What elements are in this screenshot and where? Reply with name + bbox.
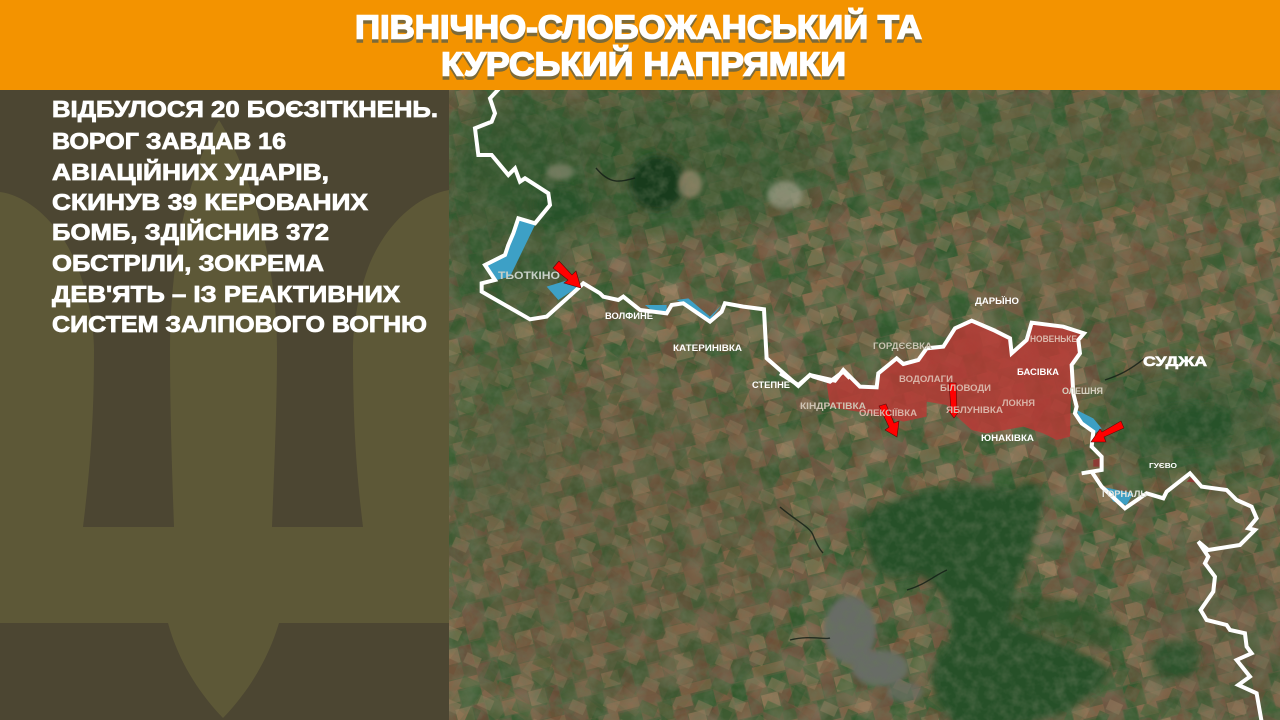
settlement labels: НОВЕНЬКЕ <box>1030 334 1077 344</box>
arrow: Yablunivka <box>948 383 960 418</box>
settlement labels: ОЛЕКСІЇВКА <box>859 408 918 418</box>
summary text block <box>52 96 438 337</box>
arrow: Tyotkino <box>553 261 581 288</box>
summary text block: ВІДБУЛОСЯ 20 БОЄЗІТКНЕНЬ. <box>52 96 438 122</box>
settlement labels: ТЬОТКІНО <box>498 270 560 282</box>
border line east <box>780 321 1262 720</box>
forest <box>534 155 1232 720</box>
header band <box>0 0 1280 90</box>
summary text block: БОМБ, ЗДІЙСНИВ 372 <box>52 218 329 245</box>
title: КУРСЬКИЙ НАПРЯМКИ <box>441 44 846 82</box>
settlement labels: ВОЛФИНЕ <box>605 311 653 321</box>
settlement labels: ВОДОЛАГИ <box>899 374 953 384</box>
title shadow <box>355 11 922 86</box>
arrow: Oleksiivka <box>879 404 899 437</box>
summary text block: СИСТЕМ ЗАЛПОВОГО ВОГНЮ <box>52 311 427 337</box>
map texture <box>449 90 1280 720</box>
summary text block: ДЕВ'ЯТЬ – ІЗ РЕАКТИВНИХ <box>52 281 401 307</box>
settlement labels: ГОРДЄЄВКА <box>873 341 933 351</box>
settlement labels: БІЛОВОДИ <box>940 383 991 393</box>
settlement labels: СУДЖА <box>1143 353 1207 369</box>
map tonal regions <box>440 80 1280 720</box>
city and villages <box>546 164 1068 702</box>
settlement labels <box>498 270 1207 499</box>
trident emblem <box>0 120 449 718</box>
title shadow: КУРСЬКИЙ НАПРЯМКИ <box>441 48 846 86</box>
settlement labels: ОЛЕШНЯ <box>1062 386 1103 396</box>
settlement labels: ЮНАКІВКА <box>981 433 1035 443</box>
settlement labels: ЯБЛУНІВКА <box>946 405 1004 415</box>
red occupied area <box>827 321 1198 505</box>
rivers <box>596 168 1145 640</box>
summary text block: СКИНУВ 39 КЕРОВАНИХ <box>52 189 369 215</box>
border line west <box>475 88 850 386</box>
settlement labels: ГУЄВО <box>1149 461 1177 470</box>
summary text block: ОБСТРІЛИ, ЗОКРЕМА <box>52 250 324 276</box>
arrow: Oleshnia <box>1091 421 1124 442</box>
title: ПІВНІЧНО-СЛОБОЖАНСЬКИЙ ТА <box>355 8 922 46</box>
settlement labels: ГОРНАЛЬ <box>1102 489 1148 499</box>
settlement labels: ДАРЬЇНО <box>975 296 1019 306</box>
summary text block: АВІАЦІЙНИХ УДАРІВ, <box>52 158 329 185</box>
summary text block: ВОРОГ ЗАВДАВ 16 <box>52 128 286 154</box>
blue contested areas <box>485 218 722 320</box>
settlement labels: КІНДРАТІВКА <box>800 401 867 411</box>
title shadow: ПІВНІЧНО-СЛОБОЖАНСЬКИЙ ТА <box>355 11 922 49</box>
satellite map <box>440 80 1280 720</box>
title <box>355 8 922 82</box>
settlement labels: ЛОКНЯ <box>1002 398 1035 408</box>
settlement labels: СТЕПНЕ <box>752 380 790 390</box>
map base farmland <box>449 90 1280 720</box>
settlement labels: КАТЕРИНІВКА <box>673 343 743 353</box>
left information panel <box>0 90 449 720</box>
settlement labels: БАСІВКА <box>1017 367 1060 377</box>
